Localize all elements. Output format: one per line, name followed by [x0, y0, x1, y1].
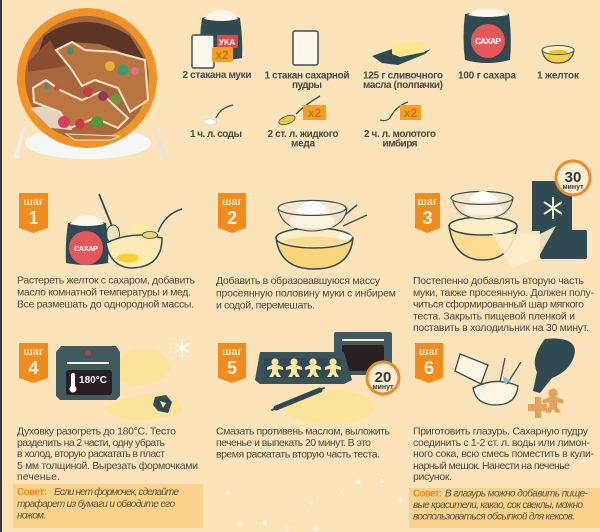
step 1 text: Все размешать до однородной массы. [17, 298, 194, 310]
ingredient: ginger: имбиря [382, 138, 418, 150]
timer 20 minutes [367, 362, 399, 394]
step badge 3: шаг [418, 196, 438, 208]
decorative snow [226, 479, 402, 530]
ingredient: ginger: x2 [404, 106, 417, 120]
ingredient: sugar: САХАР [475, 36, 501, 46]
step 2 text: Добавить в образовавшуюся массу [216, 275, 381, 287]
step 3 text: теста. Закрыть пищевой пленкой и [413, 310, 575, 322]
timer 30 minutes: минут [562, 184, 584, 191]
step badge 2: шаг [222, 196, 242, 208]
illustration: oven, tray, rolling pin [255, 332, 392, 424]
step badge 1: шаг [24, 196, 44, 208]
ingredient: soda: 1 ч. л. соды [190, 129, 242, 140]
illustration: glass, bowl, piping bag, cookies [455, 339, 575, 418]
step 6 text [413, 426, 594, 483]
tip box 4 [13, 484, 203, 528]
step 6 text: ного сока, всю смесь поместить в кули- [413, 448, 594, 460]
step 5 text: Смазать противень маслом, выложить [216, 426, 391, 438]
tip box 4: Если нет формочек, сделайте [54, 486, 179, 498]
step 1 text: масло комнатной температуры и мед. [17, 286, 191, 298]
step badge 6: 6 [424, 358, 434, 378]
step badge 5: шаг [222, 346, 242, 358]
timer 30 minutes [556, 161, 590, 195]
ingredient: yolk: 1 желток [537, 70, 580, 82]
hero: gingerbread on a plate [13, 8, 168, 160]
step 3 text: поставить в холодильник на 30 минут. [413, 322, 589, 334]
ingredient: flour: x2 [215, 48, 229, 62]
step 6 text: нарный мешок. Нанести на печенье [413, 460, 570, 472]
ingredient: sugar: 100 г сахара [458, 70, 516, 82]
step 3 text: муки, также просеянную. Должен полу- [413, 287, 594, 299]
step 5 [216, 332, 402, 530]
step 6 text: соединить с 1-2 ст. л. воды или лимон- [413, 437, 590, 449]
step badge 2: 2 [227, 208, 237, 228]
step badge 2 [218, 193, 246, 233]
ingredient: flour [182, 10, 252, 81]
tip box 6 [409, 488, 600, 528]
step badge 4 [19, 343, 48, 383]
illustration: sugar, whisk and bowl [66, 194, 182, 268]
ingredient: honey: x2 [308, 106, 321, 120]
tip box 4: ножом. [17, 510, 46, 522]
ingredient: honey [268, 96, 338, 150]
step 4 text: 5 мм толщиной. Вырезать формочками [17, 460, 198, 472]
step 1 text: Растереть желток с сахаром, добавить [17, 274, 196, 286]
tip box 6: Совет: [413, 488, 442, 500]
ingredient: yolk [537, 46, 580, 82]
ingredient: ginger: 2 ч. л. молотого [364, 129, 436, 140]
ingredient: flour: 2 стакана муки [182, 70, 252, 81]
step 2 text: и содой, перемешать. [216, 300, 315, 312]
tip box 6: воспользоваться обсыпкой для кексов. [413, 510, 575, 522]
step 6 text: рисунок. [413, 471, 452, 483]
timer 20 minutes: 20 [375, 369, 391, 386]
step badge 6: шаг [419, 346, 439, 358]
step badge 5 [218, 343, 246, 383]
step 3 text: читься сформированный шар мягкого [413, 298, 584, 310]
ingredient: powdered sugar: 1 стакан сахарной [264, 70, 350, 82]
ingredient: butter: 125 г сливочного [363, 70, 443, 82]
illustration: sugar, whisk and bowl: САХАР [74, 244, 98, 253]
ingredient: honey: 2 ст. л. жидкого [268, 129, 338, 140]
step 2 text [216, 275, 396, 312]
step 4 text: Духовку разогреть до 180°C. Тесто [17, 426, 176, 438]
ingredient: powdered sugar [264, 31, 350, 91]
tip box 6: вые красители, какао, сок свеклы, можно [413, 500, 583, 511]
step 3 text [413, 275, 594, 334]
step 1 text [17, 274, 196, 310]
illustration: oven with dough: 180°C [79, 375, 107, 386]
step 4 text: разделить на 2 части, одну убрать [17, 437, 166, 449]
step 4 text: в холод, вторую раскатать в пласт [17, 448, 165, 460]
illustration: sieve, bowl, fridge [449, 181, 587, 268]
step 2 [216, 193, 396, 312]
step 4 text: печенье. [17, 471, 60, 483]
ingredient: butter: масла (полпачки) [363, 80, 443, 91]
step badge 1: 1 [28, 208, 39, 228]
ingredient: flour: УКА [219, 37, 235, 47]
timer 20 minutes: минут [372, 384, 394, 391]
step 3 [413, 161, 594, 334]
ingredient: ginger [364, 102, 436, 150]
illustration: oven with dough [56, 339, 190, 420]
step 6 [409, 339, 600, 528]
step badge 3 [415, 193, 440, 233]
tip box 6: В глазурь можно добавить пище- [445, 488, 589, 500]
step 4 text [17, 426, 198, 483]
step 1 [17, 193, 196, 310]
step 2 text: просеянную половину муки с инбирем [216, 288, 396, 300]
timer 30 minutes: 30 [565, 169, 581, 186]
step badge 4: шаг [24, 346, 44, 358]
step 5 text: время раскатать вторую часть теста. [216, 448, 380, 460]
step 4 [13, 339, 203, 528]
ingredient: soda [190, 105, 242, 140]
tip box 4: Совет: [17, 487, 47, 498]
step 3 text: Постепенно добавлять вторую часть [413, 275, 585, 287]
step badge 6 [415, 343, 443, 383]
step 5 text: печенье и выпекать 20 минут. В это [216, 437, 371, 449]
ingredient: butter [363, 41, 443, 91]
tip box 4: трафарет из бумаги и обводите его [17, 498, 175, 510]
step badge 3: 3 [422, 208, 433, 228]
step 5 text [216, 426, 391, 460]
step badge 5: 5 [227, 358, 237, 378]
step 6 text: Приготовить глазурь. Сахарную пудру [413, 426, 589, 438]
step badge 1 [19, 193, 48, 233]
ingredient: sugar [458, 9, 516, 82]
illustration: sieve over bowl [276, 200, 367, 269]
ingredient: powdered sugar: пудры [292, 80, 322, 91]
step badge 4: 4 [28, 358, 39, 378]
ingredient: honey: меда [291, 138, 315, 150]
